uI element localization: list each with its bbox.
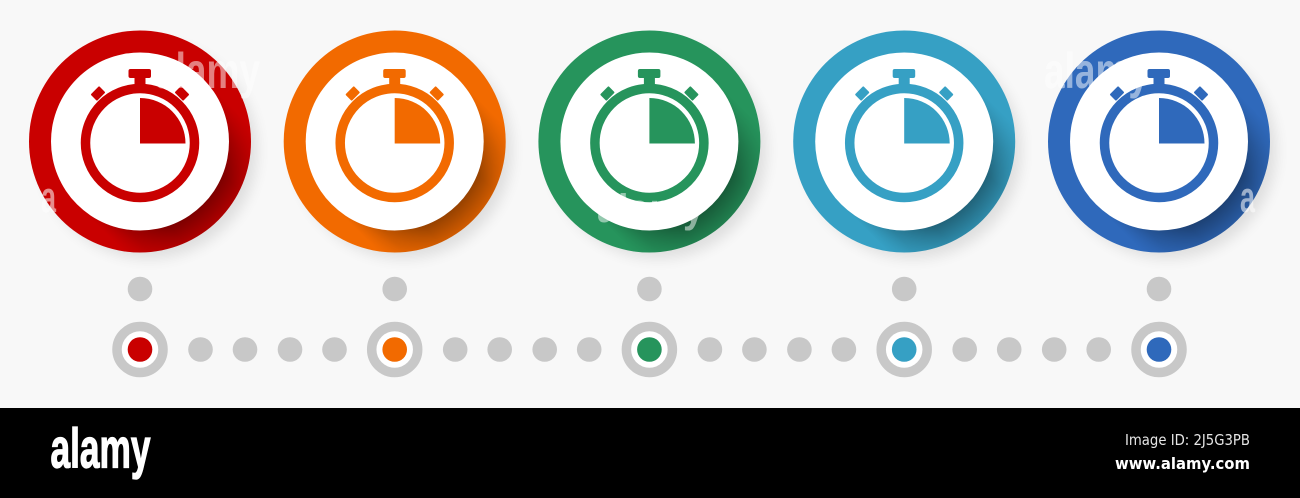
footer bar xyxy=(0,408,1300,498)
footer logo: alamy: alamy xyxy=(50,416,150,480)
timeline marker: green xyxy=(626,326,672,372)
watermark text: a xyxy=(41,173,56,222)
connector dots above markers xyxy=(128,277,1171,301)
watermark text: alamy xyxy=(155,43,260,99)
footer text: image id: Image ID: 2J5G3PB xyxy=(1125,431,1250,449)
timeline small dots xyxy=(188,337,1111,362)
timeline marker: orange xyxy=(372,326,418,372)
footer text: website: www.alamy.com xyxy=(1115,454,1250,473)
timeline marker: red xyxy=(117,326,163,372)
icon: green stopwatch badge xyxy=(538,30,766,258)
timeline marker: teal xyxy=(881,326,927,372)
watermark text: alamy xyxy=(1044,43,1149,99)
timeline marker: blue xyxy=(1136,326,1182,372)
icon: teal stopwatch badge xyxy=(793,30,1021,258)
icon: blue stopwatch badge xyxy=(1048,30,1276,258)
watermark text xyxy=(41,43,1255,231)
icon: red stopwatch badge xyxy=(29,30,257,258)
icon: orange stopwatch badge xyxy=(284,30,512,258)
watermark text: alamy xyxy=(597,187,705,231)
watermark text: a xyxy=(1240,173,1255,222)
